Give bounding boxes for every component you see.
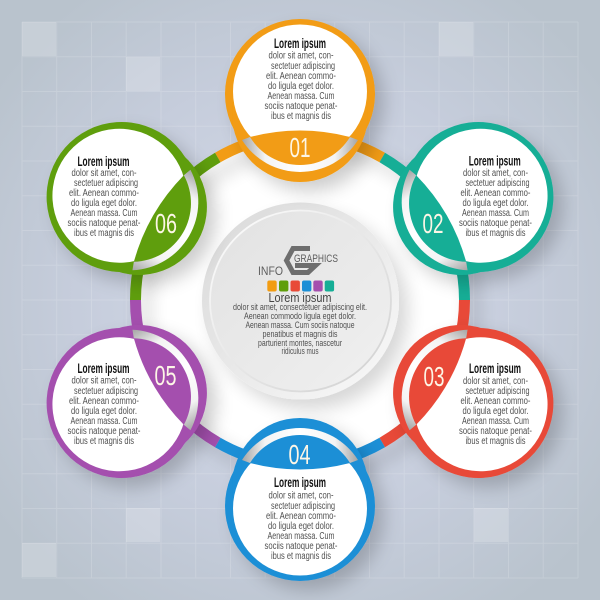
text block: sectetuer adipiscing — [466, 386, 530, 397]
heading: Lorem ipsum — [78, 154, 130, 169]
text block: dolor sit amet, con- — [268, 490, 334, 502]
heading: Lorem ipsum — [469, 361, 521, 376]
panel: 03 red — [365, 294, 581, 505]
logo: infographics hexagon: INFO — [258, 264, 283, 278]
text block — [264, 50, 338, 122]
text block: do ligula eget dolor. — [268, 81, 334, 92]
text block: elit. Aenean commo- — [460, 188, 530, 199]
panel: 05 purple — [19, 294, 235, 505]
number: 03 — [424, 361, 444, 392]
text block: dolor sit amet, con- — [72, 168, 136, 179]
text block — [68, 376, 140, 447]
text block: dolor sit amet, con- — [72, 376, 136, 386]
heading: Lorem ipsum — [274, 36, 326, 51]
text block: ibus et magnis dis — [271, 551, 331, 562]
text block: do ligula eget dolor. — [268, 521, 334, 532]
text block: sociis natoque penat- — [459, 218, 532, 229]
text block: dolor sit amet, con- — [463, 168, 528, 179]
text block: sociis natoque penat- — [264, 541, 338, 552]
text block: Aenean massa. Cum — [70, 416, 138, 427]
text block: do ligula eget dolor. — [71, 406, 137, 417]
text block: do ligula eget dolor. — [462, 406, 528, 417]
logo: infographics hexagon: GRAPHICS — [294, 253, 338, 265]
text block: Aenean massa. Cum — [70, 208, 138, 219]
heading: Lorem ipsum — [469, 154, 521, 168]
heading: Lorem ipsum — [274, 475, 326, 490]
centre text block: dolor sit amet, consectetuer adipiscing elit. — [233, 302, 367, 312]
number: 04 — [288, 439, 310, 470]
centre heading: Lorem ipsum — [268, 291, 332, 305]
text block: Aenean massa. Cum — [268, 91, 334, 102]
heading: Lorem ipsum — [78, 361, 130, 376]
text block: sociis natoque penat- — [264, 101, 338, 112]
text block: elit. Aenean commo- — [460, 396, 530, 407]
panel: 06 green — [19, 95, 235, 306]
text block: sectetuer adipiscing — [74, 178, 138, 189]
text block: sectetuer adipiscing — [271, 61, 335, 72]
logo: infographics hexagon — [258, 248, 338, 278]
text block: elit. Aenean commo- — [69, 188, 139, 199]
text block — [459, 376, 532, 447]
number: 01 — [290, 132, 310, 163]
text block: Aenean massa. Cum — [268, 531, 334, 542]
centre text block: penatibus et magnis dis — [262, 329, 338, 339]
segmented outer ring — [135, 135, 465, 465]
centre text block: Aenean massa. Cum sociis natoque — [246, 320, 354, 330]
text block: sociis natoque penat- — [68, 218, 140, 229]
text block: ibus et magnis dis — [466, 436, 526, 447]
text block: do ligula eget dolor. — [462, 198, 528, 209]
text block: do ligula eget dolor. — [71, 198, 137, 209]
panel: 01 orange — [225, 19, 375, 182]
text block: dolor sit amet, con- — [463, 376, 528, 387]
centre text block: parturient montes, nascetur — [258, 338, 342, 348]
text block: ibus et magnis dis — [74, 436, 134, 447]
text block: dolor sit amet, con- — [268, 50, 334, 62]
text block: Aenean massa. Cum — [462, 416, 529, 427]
text block: sociis natoque penat- — [68, 426, 140, 437]
text block: ibus et magnis dis — [466, 228, 526, 239]
text block — [264, 490, 338, 562]
number: 06 — [155, 208, 177, 239]
centre text block: Aenean commodo ligula eget dolor. — [244, 311, 356, 321]
panel: 04 blue — [225, 418, 375, 581]
text block: sectetuer adipiscing — [271, 501, 335, 512]
text block: elit. Aenean commo- — [266, 511, 336, 522]
text block: ibus et magnis dis — [271, 111, 331, 122]
panel: 02 teal — [365, 95, 581, 306]
text block: elit. Aenean commo- — [69, 396, 139, 407]
text block: ibus et magnis dis — [74, 228, 134, 239]
text block — [68, 168, 140, 239]
disc — [202, 202, 399, 400]
colour swatches — [267, 280, 334, 292]
white inner disc — [140, 140, 460, 460]
text block — [459, 168, 532, 239]
text block: elit. Aenean commo- — [266, 71, 336, 82]
text block: Aenean massa. Cum — [462, 208, 529, 219]
text block: sectetuer adipiscing — [74, 386, 138, 397]
number: 05 — [154, 360, 176, 391]
centre text block: ridiculus mus — [282, 346, 319, 356]
panel: centre circle — [202, 202, 399, 400]
text block: sectetuer adipiscing — [466, 178, 530, 189]
text block: sociis natoque penat- — [459, 426, 532, 437]
number: 02 — [422, 208, 444, 239]
centre text block — [233, 302, 367, 356]
